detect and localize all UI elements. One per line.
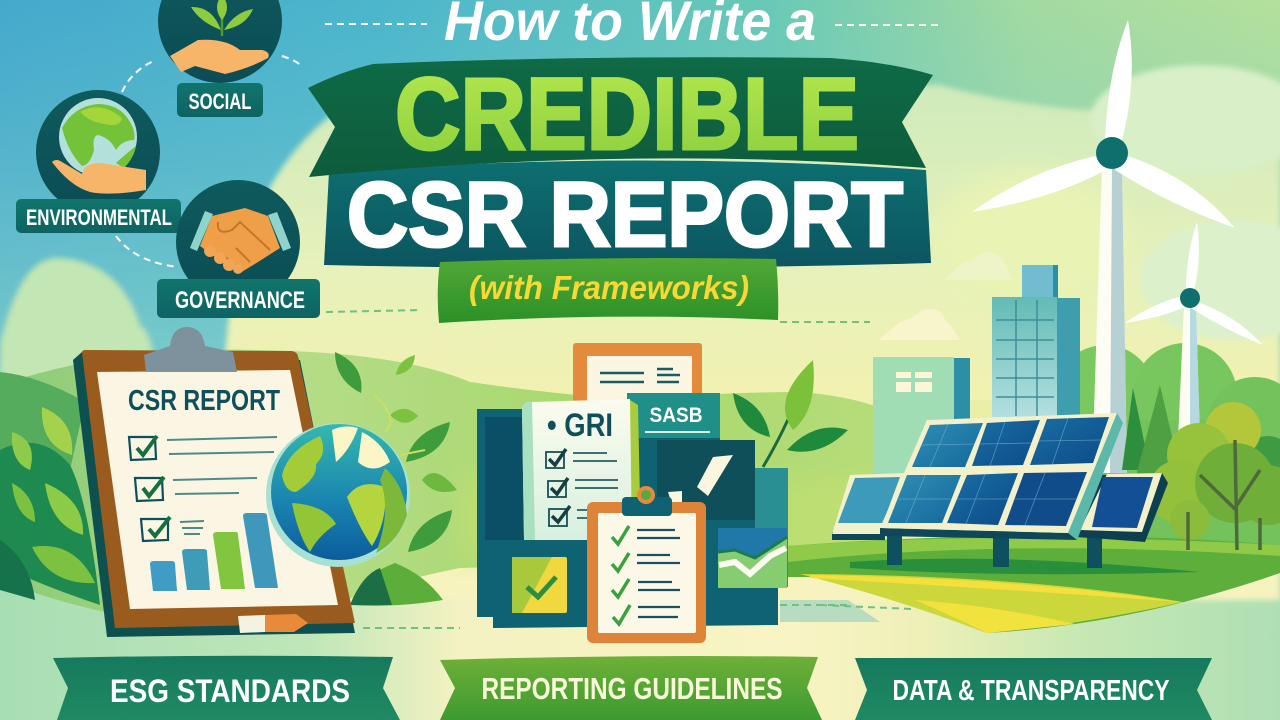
ribbon: ESG standards: ESG STANDARDS <box>110 673 350 709</box>
ribbon: subtitle <box>438 258 778 323</box>
icon: globe <box>266 423 410 567</box>
clouds <box>878 252 1012 340</box>
mini chart card <box>718 528 787 588</box>
ribbon: top <box>308 57 933 177</box>
ribbon: ESG standards <box>53 656 400 720</box>
heading: credible: CREDIBLE <box>395 57 859 171</box>
legs <box>887 530 1102 568</box>
GRI document: • GRI <box>547 407 613 443</box>
top document <box>573 343 702 403</box>
left building <box>873 357 970 475</box>
checklist <box>129 436 277 541</box>
dark tablet <box>657 440 755 520</box>
hand <box>52 160 146 194</box>
label: social <box>177 83 263 117</box>
hand <box>170 40 269 74</box>
globe small <box>59 98 137 176</box>
label: environmental <box>16 199 181 233</box>
ribbon: data and transparency <box>855 658 1212 720</box>
checklist clipboard <box>587 488 706 643</box>
title block <box>308 0 933 323</box>
left small panel <box>832 473 905 540</box>
sprout <box>191 0 253 36</box>
folder inner pocket <box>485 417 525 540</box>
illustration: large wind turbine <box>972 20 1235 473</box>
ribbon: reporting guidelines: REPORTING GUIDELINES <box>482 671 782 706</box>
foliage: left plants <box>0 407 100 605</box>
clipboard board <box>82 350 355 628</box>
dashed connectors <box>116 24 940 628</box>
ribbon: data and transparency: DATA & TRANSPARENCY <box>892 675 1170 707</box>
illustration: trees <box>1122 385 1280 550</box>
subtitle: (with Frameworks) <box>469 269 749 306</box>
icon: environmental <box>16 90 181 233</box>
GRI document <box>522 399 640 540</box>
foliage: right leaves <box>335 352 457 606</box>
icon: social <box>158 0 282 117</box>
handshake <box>190 208 291 274</box>
label: environmental: ENVIRONMENTAL <box>26 205 172 230</box>
panel: frameworks documents <box>477 343 848 643</box>
SASB card <box>627 393 720 438</box>
folder <box>477 395 788 628</box>
bar chart <box>150 513 278 591</box>
heading: csr report: CSR REPORT <box>347 164 903 266</box>
label: governance: GOVERNANCE <box>175 287 305 314</box>
illustration: solar panels <box>832 413 1168 568</box>
yellow check tile <box>512 557 567 613</box>
ribbon: reporting guidelines <box>440 656 822 720</box>
SASB card: SASB <box>650 404 702 427</box>
board shadow <box>73 352 355 637</box>
tall glass building <box>992 265 1080 417</box>
main panel frame <box>1068 413 1123 540</box>
icon: clip <box>144 327 237 372</box>
right small panel <box>1078 473 1168 542</box>
label: social: SOCIAL <box>188 89 252 114</box>
right tab <box>755 468 788 587</box>
label: governance <box>157 279 320 318</box>
ribbon: main band <box>324 160 931 268</box>
panel: CSR report clipboard <box>73 327 355 637</box>
icon: governance <box>157 180 320 318</box>
plant leaves <box>733 360 848 467</box>
report heading: CSR REPORT <box>128 385 280 417</box>
solar cells <box>888 417 1109 526</box>
illustration: buildings <box>873 252 1080 475</box>
illustration: small wind turbine <box>1125 222 1263 440</box>
paper <box>97 370 338 609</box>
icon: pencil <box>238 614 308 633</box>
